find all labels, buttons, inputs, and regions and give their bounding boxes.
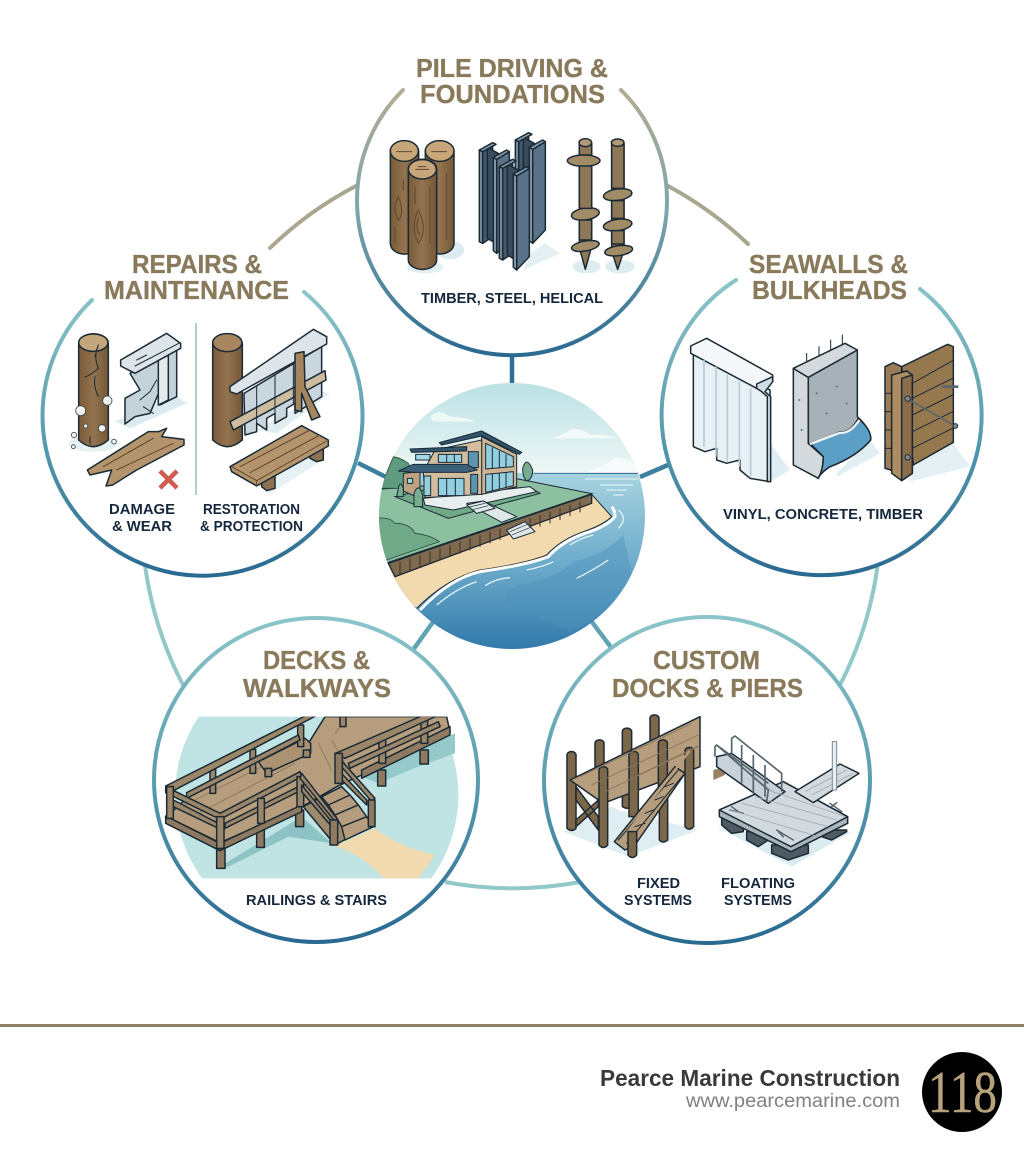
heading: PILE DRIVING & xyxy=(416,53,608,83)
panel: repairs and maintenance xyxy=(43,249,363,576)
spokes from centre to panels xyxy=(358,352,668,650)
icon: cracked wall xyxy=(115,333,187,428)
icon: red X xyxy=(160,471,177,488)
illustration: deck with stairs xyxy=(164,716,458,878)
illustration: floating dock xyxy=(713,736,859,867)
heading xyxy=(749,249,908,305)
caption: TIMBER, STEEL, HELICAL xyxy=(421,291,603,307)
heading: DECKS & xyxy=(263,645,370,675)
heading: CUSTOM xyxy=(653,645,760,675)
captions: SYSTEMS xyxy=(724,893,792,909)
sky and clouds xyxy=(388,383,638,473)
captions: & WEAR xyxy=(112,519,173,535)
sea xyxy=(370,473,657,653)
heading: DOCKS & PIERS xyxy=(612,673,803,703)
heading: SEAWALLS & xyxy=(749,249,908,279)
shoreline and foam xyxy=(383,494,623,610)
panel: decks and walkways xyxy=(154,618,478,942)
heading: BULKHEADS xyxy=(752,275,907,305)
icon: new timber bench xyxy=(230,426,328,493)
captions: FLOATING xyxy=(721,876,795,892)
captions xyxy=(109,502,303,535)
captions xyxy=(624,876,795,909)
footer badge: 118 xyxy=(922,1052,1002,1132)
panel: custom docks and piers xyxy=(544,617,870,943)
icon: timber piles xyxy=(390,141,464,273)
captions: SYSTEMS xyxy=(624,893,692,909)
footer: company name and website: www.pearcemarine.com xyxy=(685,1091,900,1112)
heading: FOUNDATIONS xyxy=(420,79,605,109)
heading xyxy=(612,645,803,703)
divider xyxy=(195,323,197,495)
panel ring xyxy=(357,90,667,355)
heading: REPAIRS & xyxy=(132,249,262,279)
icon: damaged pile xyxy=(68,334,118,452)
footer: company name and website xyxy=(600,1065,900,1112)
heading xyxy=(243,645,391,703)
icon: broken plank xyxy=(87,428,184,486)
heading: WALKWAYS xyxy=(243,673,391,703)
heading: MAINTENANCE xyxy=(104,275,289,305)
heading xyxy=(416,53,608,109)
house xyxy=(397,431,537,539)
panel ring xyxy=(544,617,870,943)
heading xyxy=(104,249,289,305)
icon: restored pile xyxy=(213,334,242,447)
icon: helical piles xyxy=(567,139,635,273)
icon: timber bulkhead xyxy=(885,344,970,482)
captions: FIXED xyxy=(637,876,680,892)
caption: VINYL, CONCRETE, TIMBER xyxy=(723,507,924,523)
icon: vinyl sheet wall xyxy=(691,338,790,482)
lawn xyxy=(370,457,592,565)
centre illustration: waterfront home xyxy=(379,383,645,649)
captions: & PROTECTION xyxy=(200,519,303,535)
panel: pile driving and foundations xyxy=(357,53,667,355)
panel ring xyxy=(154,618,478,942)
icon: concrete wall xyxy=(793,335,880,478)
icon: repaired wall xyxy=(230,329,330,435)
footer divider xyxy=(0,1024,1024,1027)
captions: RESTORATION xyxy=(203,502,300,518)
seawall xyxy=(388,494,592,577)
footer badge: 118: 118 xyxy=(928,1059,997,1125)
panel: seawalls and bulkheads xyxy=(662,249,982,575)
footer: company name and website: Pearce Marine Construction xyxy=(600,1065,900,1091)
captions: DAMAGE xyxy=(109,502,175,518)
panel ring xyxy=(662,280,982,575)
panel ring xyxy=(43,292,363,576)
illustration: fixed dock xyxy=(563,715,700,857)
outer connecting ring xyxy=(145,186,878,888)
icon: steel H-piles xyxy=(479,133,560,270)
caption: RAILINGS & STAIRS xyxy=(246,893,387,909)
